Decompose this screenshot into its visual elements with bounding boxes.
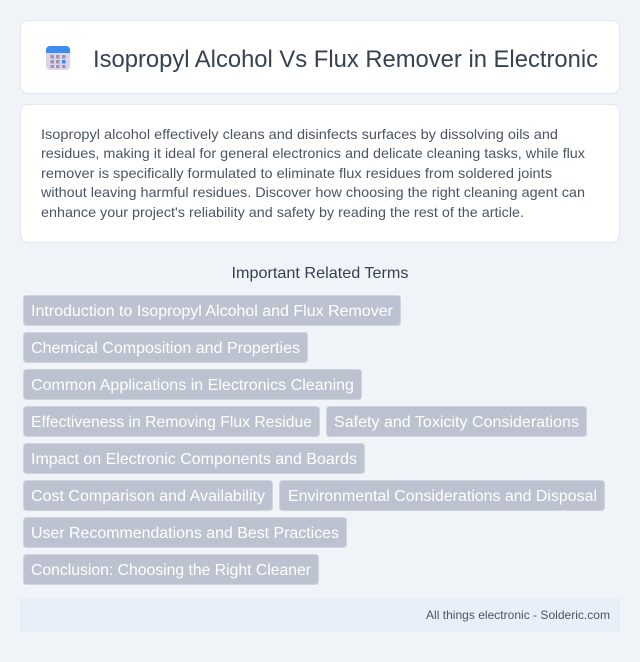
- tag: environmental: [280, 480, 604, 510]
- tag: effectiveness: Effectiveness in Removing Flux Residue: [31, 414, 312, 431]
- icon: calendar: [46, 46, 70, 70]
- tag: conclusion: [24, 554, 318, 584]
- tag: safety: [326, 406, 586, 436]
- tag: cost: [24, 480, 272, 510]
- tag: conclusion: Conclusion: Choosing the Right Cleaner: [31, 562, 311, 579]
- tag: introduction: [24, 296, 400, 326]
- tag: chemical composition: [24, 332, 308, 362]
- tag: effectiveness: [24, 406, 320, 436]
- tag: impact: [24, 444, 364, 474]
- title: Isopropyl Alcohol Vs Flux Remover in Electronic: [93, 46, 598, 73]
- tag: environmental: Environmental Considerations and Disposal: [288, 488, 597, 505]
- intro paragraph: remover is specifically formulated to eliminate flux residues from soldered joints: [41, 165, 552, 181]
- intro paragraph: [40, 126, 585, 220]
- tag: chemical composition: Chemical Composition and Properties: [31, 340, 300, 357]
- tag: cost: Cost Comparison and Availability: [31, 488, 265, 505]
- tag: safety: Safety and Toxicity Considerations: [334, 414, 579, 431]
- intro panel: [20, 104, 620, 242]
- tag: recommendations: [24, 518, 346, 548]
- intro paragraph: Isopropyl alcohol effectively cleans and disinfects surfaces by dissolving oils and: [41, 126, 558, 142]
- tag: introduction: Introduction to Isopropyl Alcohol and Flux Remover: [31, 303, 393, 320]
- section heading: Important Related Terms: [232, 265, 408, 282]
- intro paragraph: enhance your project's reliability and safety by reading the rest of the article.: [41, 204, 524, 220]
- header card: [20, 20, 620, 94]
- tag: common applications: [24, 370, 362, 400]
- intro paragraph: without leaving harmful residues. Discover how choosing the right cleaning agent can: [40, 184, 585, 200]
- tag: impact: Impact on Electronic Components and Boards: [31, 451, 357, 468]
- footer text: All things electronic - Solderic.com: [426, 608, 610, 622]
- intro paragraph: residues, making it ideal for general electronics and delicate cleaning tasks, while flux: [41, 145, 585, 161]
- footer: [20, 598, 620, 632]
- tag: common applications: Common Applications in Electronics Cleaning: [31, 377, 354, 394]
- tag list: [24, 296, 604, 584]
- tag: recommendations: User Recommendations and Best Practices: [31, 525, 339, 542]
